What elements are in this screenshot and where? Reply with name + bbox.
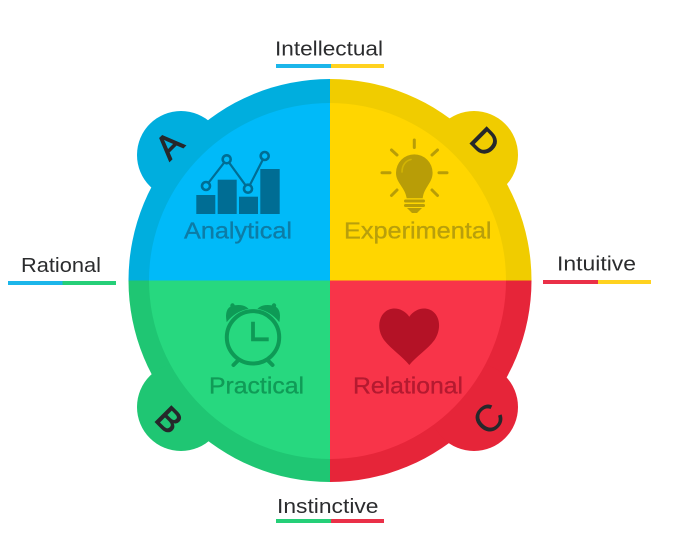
icon: heart [379,309,439,365]
panel: analytical quadrant [128,79,330,280]
axis label: Intellectual [275,38,384,68]
axis label: Rational [8,254,116,285]
icon: alarm clock [227,303,279,365]
label: Relational: Relational [353,372,463,398]
axis label: Intuitive [543,252,651,284]
axis label: Rational: Rational [21,254,101,277]
axis label: Instinctive [276,495,384,523]
icon: light bulb [382,140,447,213]
axis label: Intellectual: Intellectual [275,38,383,60]
axis label: Intuitive: Intuitive [557,252,636,276]
axis label: Instinctive: Instinctive [277,495,378,518]
letter D: D [462,120,507,165]
panel: experimental quadrant [330,79,532,280]
letter C: C [465,395,513,443]
label: Practical: Practical [209,372,304,398]
icon: bar chart with line [196,152,280,214]
panel: relational quadrant [330,280,532,482]
label: Experimental: Experimental [344,218,492,244]
letter A: A [148,124,191,167]
panel: practical quadrant [128,280,330,482]
letter B: B [148,399,190,441]
label: Analytical: Analytical [184,218,292,244]
